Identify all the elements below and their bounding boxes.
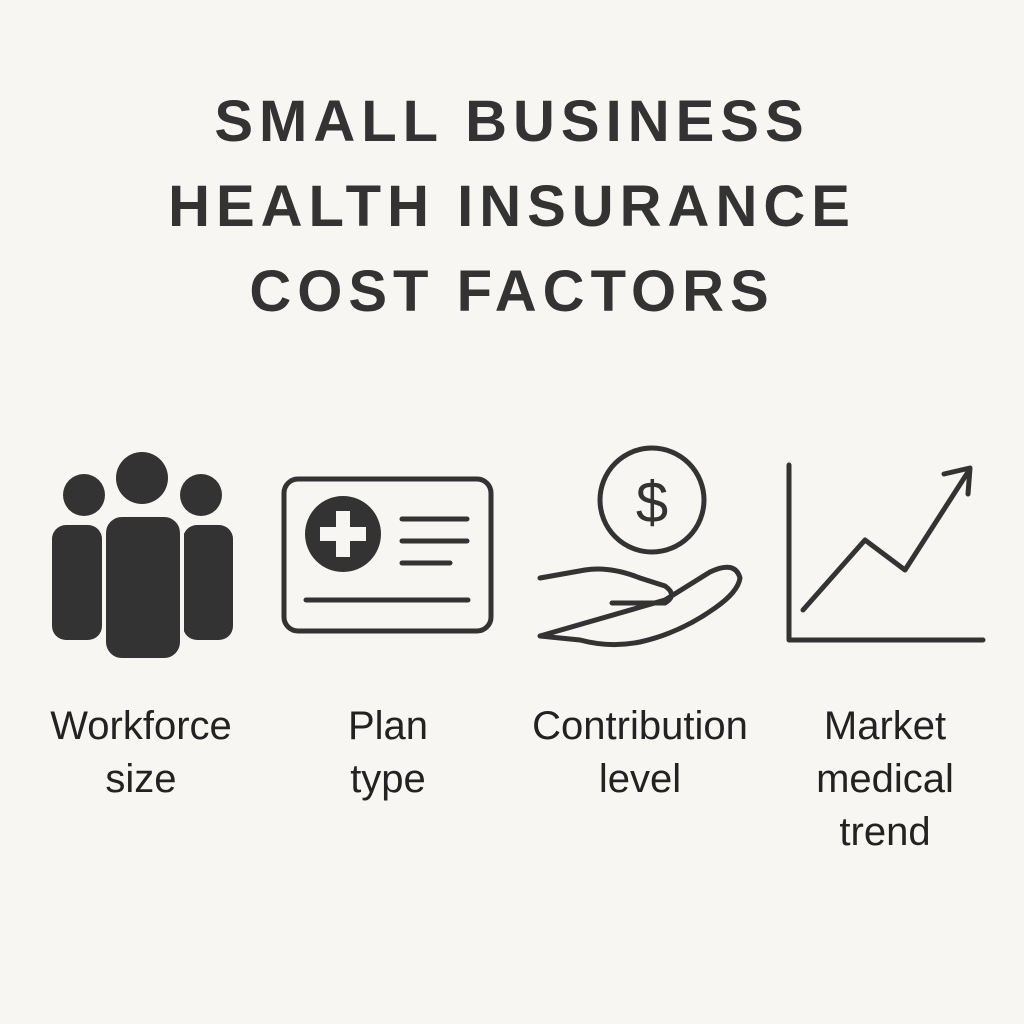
label: workforce size: size (105, 757, 177, 801)
label: market medical trend: Market (824, 704, 946, 748)
label: contribution level: level (599, 757, 681, 801)
label: workforce size: Workforce (50, 704, 232, 748)
label: market medical trend: trend (839, 810, 931, 854)
label: plan type: type (350, 757, 426, 801)
icon: hand with coin: $ (636, 470, 668, 535)
title (168, 89, 856, 324)
icon: hand with coin (540, 448, 740, 645)
icon: insurance card (284, 479, 491, 631)
title: COST FACTORS (249, 259, 775, 324)
label: market medical trend: medical (816, 757, 954, 801)
label: workforce size (50, 704, 232, 801)
title: HEALTH INSURANCE (168, 174, 856, 239)
icon: people (52, 452, 233, 660)
label: plan type: Plan (348, 704, 428, 748)
title: SMALL BUSINESS (214, 89, 810, 154)
label: market medical trend (816, 704, 954, 854)
label: contribution level (532, 704, 748, 801)
label: plan type (348, 704, 428, 801)
label: contribution level: Contribution (532, 704, 748, 748)
icon: rising chart (789, 465, 983, 640)
